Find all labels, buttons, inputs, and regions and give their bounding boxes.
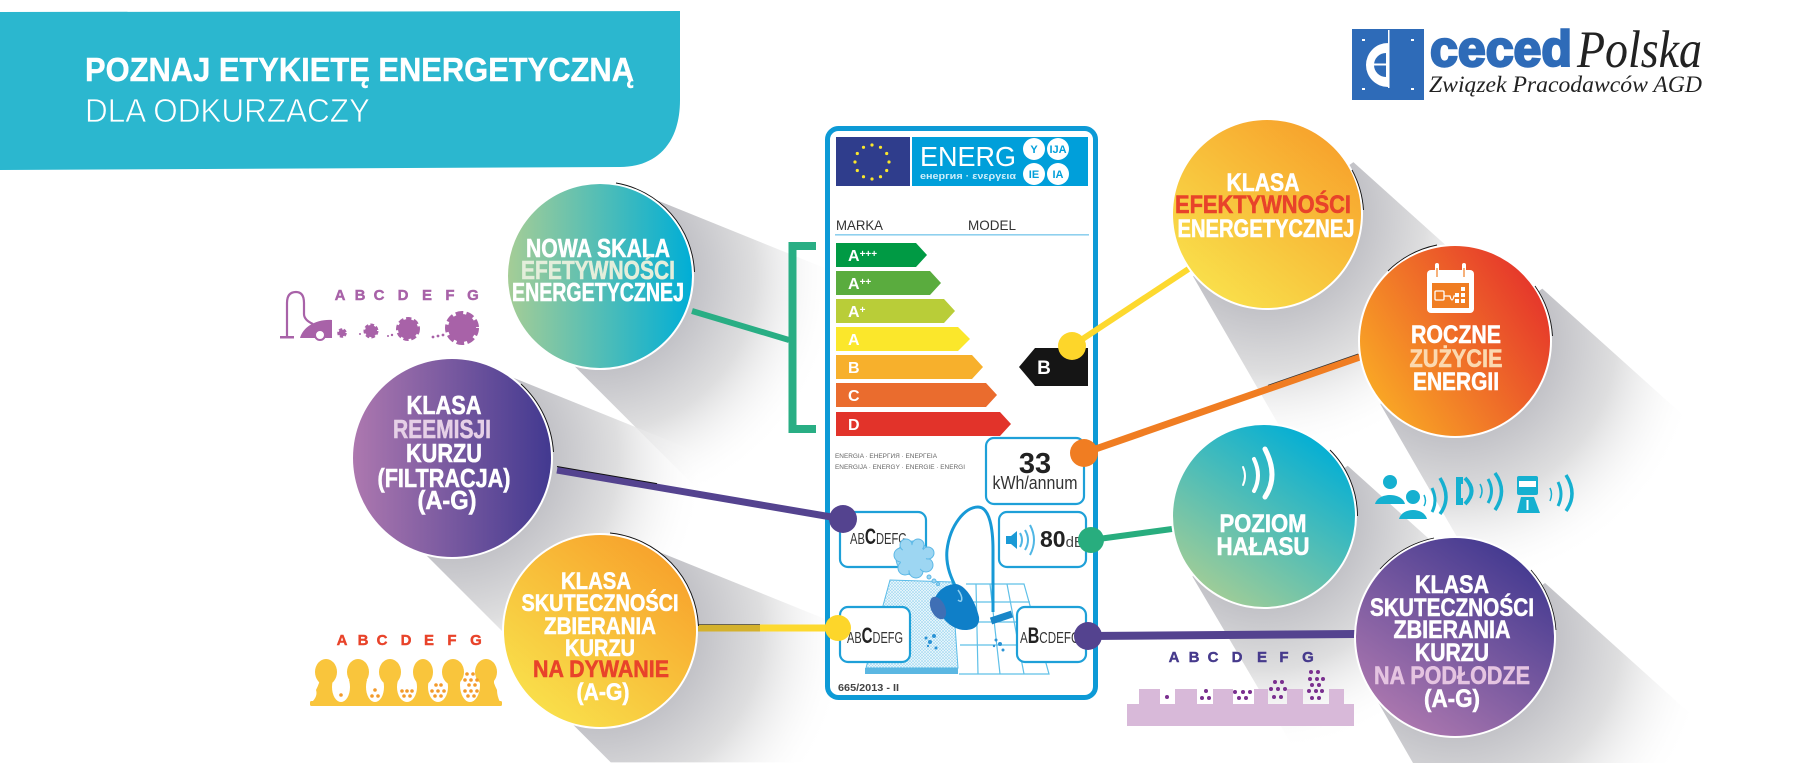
ENERG header: енергия · ενεργεια xyxy=(920,171,1016,182)
circle: new energy efficiency scale: EFETYWNOŚCI xyxy=(521,255,675,285)
circle: dust re-emission class: (A-G) xyxy=(418,485,476,515)
circle: dust re-emission class: KURZU xyxy=(406,438,482,468)
circle: dust re-emission class xyxy=(351,357,554,559)
floor crevices with dust xyxy=(1127,670,1354,726)
icon: sound waves xyxy=(1243,449,1272,497)
connector: annual consumption (orange) xyxy=(1070,354,1360,467)
circle: carpet dust pick-up class: KLASA xyxy=(561,568,631,595)
energy class arrows: + xyxy=(860,305,866,316)
circle: dust re-emission class: REEMISJI xyxy=(393,414,491,444)
annual consumption box xyxy=(986,438,1084,504)
circle: dust re-emission class: KLASA xyxy=(406,390,482,420)
circle: hard floor dust pick-up class: (A-G) xyxy=(1424,685,1480,713)
energy class arrows: C xyxy=(848,388,860,405)
icon: calendar with plug xyxy=(1427,265,1474,313)
energy class arrows: B xyxy=(848,360,860,377)
energy word list xyxy=(835,453,965,471)
indigo scale letters: F xyxy=(1279,649,1289,666)
purple scale letters: E xyxy=(422,287,432,304)
logo wordmark ceced: ceced xyxy=(1430,21,1572,77)
class indicator B: B xyxy=(1037,358,1051,379)
noise level box xyxy=(999,512,1086,567)
title line 1: POZNAJ ETYKIETĘ ENERGETYCZNĄ xyxy=(85,51,634,88)
icon: bus on road xyxy=(1517,475,1572,513)
ENERG header xyxy=(912,137,1088,186)
brand and model: MODEL xyxy=(968,217,1016,233)
circle: annual energy consumption xyxy=(1358,244,1552,438)
red scale letters: C xyxy=(377,632,388,649)
connector: hard floor (purple) xyxy=(1074,622,1355,650)
EU flag xyxy=(836,137,910,186)
pictogram: hard floor scale xyxy=(1127,649,1354,726)
indigo scale letters xyxy=(1169,649,1314,666)
carpet and tile floor xyxy=(865,580,1049,674)
indigo scale letters: B xyxy=(1189,649,1200,666)
energy label panel xyxy=(828,128,1096,698)
pictogram: carpet scale xyxy=(310,632,504,706)
indigo scale letters: C xyxy=(1208,649,1219,666)
energy class arrows: +++ xyxy=(860,249,877,260)
annual consumption box: kWh/annum xyxy=(992,473,1078,493)
logo: CECED Polska xyxy=(1352,21,1702,100)
re-emission class box xyxy=(840,512,926,567)
energy class arrows: ++ xyxy=(860,277,871,288)
circle: hard floor dust pick-up class xyxy=(1354,536,1556,738)
red scale letters: A xyxy=(337,632,348,649)
dust clouds growing xyxy=(338,314,476,342)
circle: annual energy consumption: ZUŻYCIE xyxy=(1410,345,1502,373)
circle: dust re-emission class: (FILTRACJA) xyxy=(378,463,510,493)
circle: energy efficiency class: ENERGETYCZNEJ xyxy=(1178,215,1354,243)
energy class arrows: A xyxy=(848,304,860,321)
energy class arrows: D xyxy=(848,417,860,434)
circle: carpet dust pick-up class: NA DYWANIE xyxy=(533,656,669,683)
purple scale letters: D xyxy=(398,287,409,304)
regulation number: 665/2013 - II xyxy=(838,682,899,694)
pictogram: noise sources xyxy=(1375,473,1572,519)
circle: hard floor dust pick-up class: NA PODŁODZE xyxy=(1374,662,1530,690)
long shadows behind circles xyxy=(425,162,1745,763)
circle: noise level xyxy=(1171,423,1358,609)
indigo scale letters: A xyxy=(1169,649,1180,666)
circle: annual energy consumption: ROCZNE xyxy=(1411,321,1501,349)
energy word list: ENERGIJA · ENERGY · ENERGIE · ENERGI xyxy=(835,464,965,471)
carpet class box xyxy=(840,607,910,662)
connector: energy class (yellow) xyxy=(1058,268,1190,360)
purple scale letters: G xyxy=(467,287,479,304)
re-emission class box: ABCDEFG xyxy=(850,524,907,549)
circle: new energy efficiency scale: NOWA SKALA xyxy=(526,233,670,263)
title banner xyxy=(0,11,680,170)
circle: hard floor dust pick-up class: KLASA xyxy=(1415,571,1489,599)
ENERG header: IE xyxy=(1029,169,1039,181)
energy class arrows: A xyxy=(848,248,860,265)
circle: new energy efficiency scale: ENERGETYCZNEJ xyxy=(512,277,684,307)
circle: noise level: POZIOM xyxy=(1220,510,1306,538)
red scale letters: E xyxy=(424,632,434,649)
logo wordmark Polska: Polska xyxy=(1576,21,1702,79)
circle: hard floor dust pick-up class: SKUTECZNOŚCI xyxy=(1370,592,1534,622)
circle: energy efficiency class xyxy=(1171,118,1364,310)
green bracket and connector xyxy=(692,246,816,429)
connector: re-emission (purple) xyxy=(557,466,857,533)
purple scale letters: C xyxy=(374,287,385,304)
vacuum cleaner xyxy=(924,507,1012,652)
circle: energy efficiency class: EFEKTYWNOŚCI xyxy=(1175,189,1351,219)
icon: people talking xyxy=(1375,475,1446,519)
ENERG header: IJA xyxy=(1049,144,1067,156)
dust cloud xyxy=(894,539,940,586)
circle: carpet dust pick-up class: SKUTECZNOŚCI xyxy=(522,589,678,617)
class indicator B xyxy=(1019,348,1088,386)
energy class arrows: A xyxy=(848,276,860,293)
noise level box: 80dB xyxy=(1040,526,1084,552)
indigo scale letters: G xyxy=(1302,649,1314,666)
circle: new energy efficiency scale xyxy=(506,182,694,370)
energy class arrows: A xyxy=(848,332,860,349)
icon: telephone xyxy=(1456,473,1502,510)
indigo scale letters: D xyxy=(1232,649,1243,666)
circle: carpet dust pick-up class xyxy=(502,533,698,729)
circle: carpet dust pick-up class: ZBIERANIA xyxy=(544,613,656,640)
purple scale letters xyxy=(335,287,479,304)
purple scale letters: A xyxy=(335,287,346,304)
red scale letters xyxy=(337,632,482,649)
red scale letters: D xyxy=(401,632,412,649)
circle: annual energy consumption: ENERGII xyxy=(1413,368,1499,396)
purple scale letters: B xyxy=(355,287,366,304)
ENERG header: Y xyxy=(1030,144,1038,156)
red scale letters: G xyxy=(470,632,482,649)
ENERG header: ENERG xyxy=(920,141,1016,172)
logo tagline: Związek Pracodawców AGD xyxy=(1429,72,1702,97)
pictogram: re-emission scale xyxy=(280,287,479,342)
carpet class box: ABCDEFG xyxy=(847,623,903,648)
ENERG header: IA xyxy=(1052,169,1064,181)
annual consumption box: 33 xyxy=(1019,448,1051,480)
carpet fibres with dust xyxy=(310,659,504,706)
circle: carpet dust pick-up class: (A-G) xyxy=(576,679,630,706)
purple scale letters: F xyxy=(445,287,455,304)
circle: carpet dust pick-up class: KURZU xyxy=(565,635,635,662)
red scale letters: F xyxy=(447,632,457,649)
floor class box: ABCDEFG xyxy=(1020,623,1080,648)
connector: carpet (yellow) xyxy=(698,615,851,641)
circle: hard floor dust pick-up class: ZBIERANIA xyxy=(1394,616,1510,644)
energy word list: ENERGIA · ЕНЕРГИЯ · ΕΝΕΡΓΕΙΑ xyxy=(835,453,938,460)
circle: noise level: HAŁASU xyxy=(1216,533,1310,561)
red scale letters: B xyxy=(358,632,369,649)
brand and model: MARKA xyxy=(836,217,884,233)
brand and model xyxy=(835,217,1089,236)
connector: noise (green) xyxy=(1078,527,1172,553)
circle: hard floor dust pick-up class: KURZU xyxy=(1415,639,1489,667)
floor class box xyxy=(1017,607,1086,662)
indigo scale letters: E xyxy=(1257,649,1267,666)
energy class arrows xyxy=(836,243,1011,436)
title line 2: DLA ODKURZACZY xyxy=(85,92,370,129)
circle: energy efficiency class: KLASA xyxy=(1226,169,1300,197)
icon: small vacuum xyxy=(280,292,332,340)
